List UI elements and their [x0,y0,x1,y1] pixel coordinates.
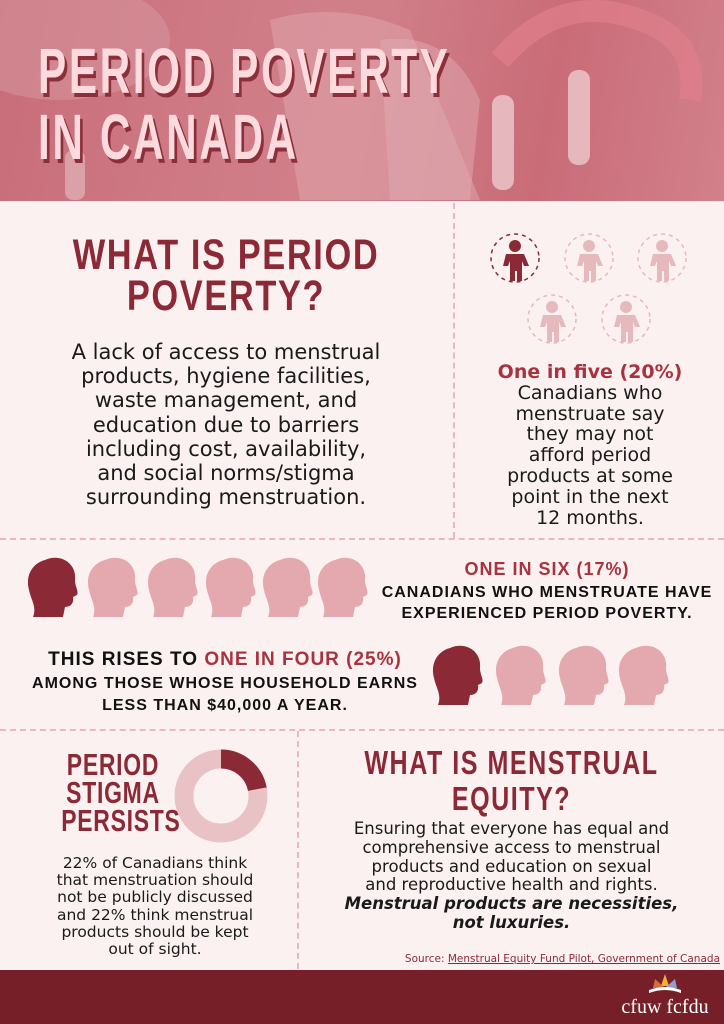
equity text: and reproductive health and rights. [365,875,658,894]
equity text: products and education on sexual [372,857,651,876]
heading [364,744,659,817]
source: Source: Menstrual Equity Fund Pilot, Government of Canada [405,953,720,965]
stat text: products at some [507,465,673,487]
stigma text: 22% of Canadians think [63,854,247,872]
heading: EQUITY? [452,780,571,817]
definition text: waste management, and [95,388,357,412]
stat text: 12 months. [536,507,644,529]
header banner [0,0,724,201]
panel: one in five [490,233,687,529]
definition text: surrounding menstruation. [86,485,366,509]
stat text [498,361,682,529]
stigma text: not be publicly discussed [57,888,253,906]
panel: period stigma [57,747,268,958]
heading: PERIOD [67,747,159,782]
heading: PERSISTS [61,803,181,838]
definition text: products, hygiene facilities, [81,364,371,388]
stat text one in six: EXPERIENCED PERIOD POVERTY. [401,605,693,622]
definition text: and social norms/stigma [97,461,355,485]
heading [61,747,181,838]
stat text one in six: CANADIANS WHO MENSTRUATE HAVE [382,584,712,600]
stigma text [57,854,253,958]
heading: POVERTY? [127,272,325,320]
heading [72,231,379,320]
footer [0,970,724,1024]
stat text: afford period [529,444,651,466]
icon: five people [490,233,687,344]
equity text: Ensuring that everyone has equal and [354,819,669,838]
title [38,35,451,173]
icon: six head silhouettes [28,558,368,617]
definition text: education due to barriers [93,413,359,437]
definition text: A lack of access to menstrual [72,340,380,364]
stat text: point in the next [511,486,669,508]
logo [621,974,709,1018]
equity text: comprehensive access to menstrual [362,838,661,857]
title: PERIOD POVERTY [38,35,451,107]
stat text: Canadians who [518,382,662,404]
stat text one in four: THIS RISES TO ONE IN FOUR (25%) [48,649,402,670]
stat text one in six: ONE IN SIX (17%) [464,559,630,579]
stigma text: products should be kept [61,923,249,941]
stat text: One in five (20%) [498,361,682,383]
stigma text: that menstruation should [57,871,253,889]
donut chart 22% [174,750,268,842]
divider lines [453,203,455,538]
definition text [72,340,380,509]
stat text one in four [32,649,418,714]
equity text: Menstrual products are necessities, [345,894,678,913]
stat text: they may not [526,423,654,445]
title: IN CANADA [38,101,299,173]
equity text: not luxuries. [453,913,570,932]
icon: four head silhouettes [432,646,668,705]
heading: WHAT IS PERIOD [73,231,379,279]
logo: cfuw fcfdu [621,996,709,1018]
panel: one in six [28,558,712,714]
stigma text: out of sight. [108,940,202,958]
definition text: including cost, availability, [86,437,366,461]
stat text one in four: LESS THAN $40,000 A YEAR. [102,697,348,714]
stat text: menstruate say [515,403,665,425]
stat text one in six [382,559,712,622]
panel: what is period poverty [72,231,380,509]
heading: WHAT IS MENSTRUAL [364,744,659,781]
stat text one in four: AMONG THOSE WHOSE HOUSEHOLD EARNS [32,674,418,692]
panel: menstrual equity [345,744,720,965]
stigma text: and 22% think menstrual [57,906,253,924]
equity text [345,819,678,932]
heading: STIGMA [66,775,160,810]
